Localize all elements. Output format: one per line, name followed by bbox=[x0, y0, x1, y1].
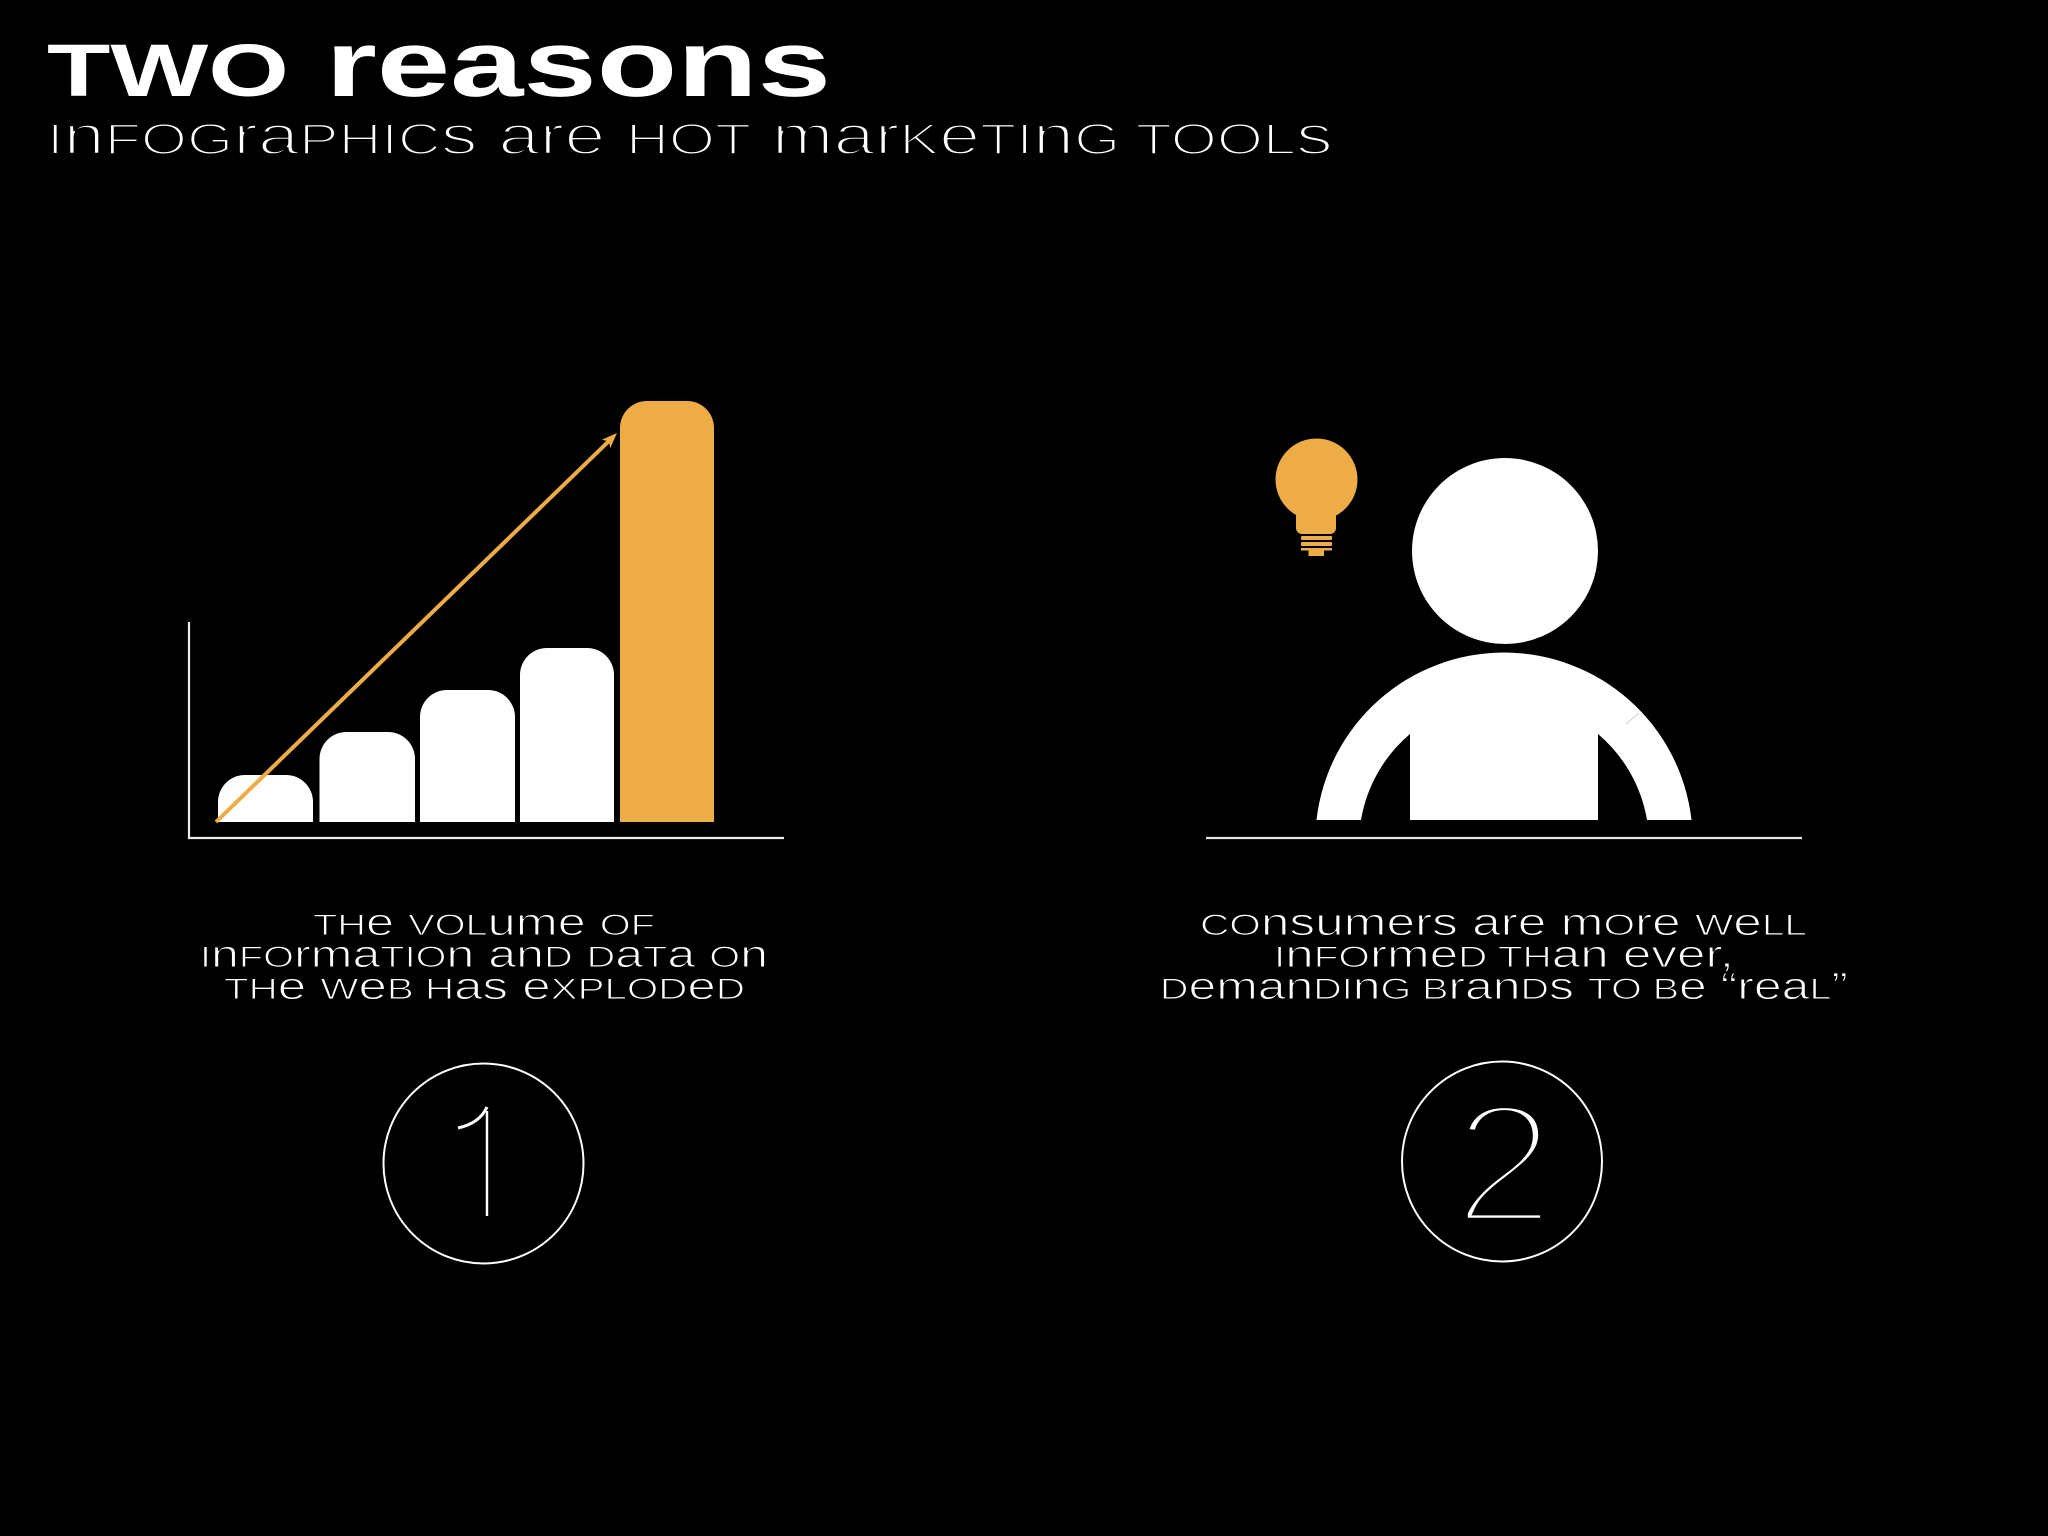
number badge 1: 1 bbox=[432, 1065, 535, 1272]
title: TWO reasons bbox=[47, 11, 831, 116]
bar 2 bbox=[320, 732, 415, 822]
bar 3 bbox=[420, 690, 515, 822]
bar 1 bbox=[218, 775, 313, 822]
panel: reason 2 bbox=[1160, 438, 1848, 1262]
arrow bbox=[216, 433, 617, 822]
icon: light bulb bbox=[1276, 438, 1358, 556]
panel: reason 1 bbox=[189, 401, 784, 1272]
bar 4 bbox=[520, 648, 614, 822]
infographic canvas bbox=[48, 44, 1846, 1264]
reason 2 text: CO nsumers are m Ore W eLL bbox=[1200, 902, 1807, 944]
bar 5 highlighted bbox=[620, 401, 714, 822]
reason 2 text: Deman DInG B ran Ds TO B e “rea L” bbox=[1160, 966, 1848, 1008]
seam on shoulder bbox=[1626, 713, 1639, 724]
reason 1 text: InFO rma TIO n an D DaTa On bbox=[200, 934, 768, 976]
number badge 2 bbox=[1402, 1062, 1602, 1262]
reason 2 text: InFO rme D TH an ever, bbox=[1274, 934, 1734, 976]
reason 1 text: TH e VOL ume OF bbox=[313, 902, 655, 944]
bar chart bbox=[189, 401, 784, 838]
icon: person with light bulb bbox=[1276, 438, 1692, 820]
reason 2 text bbox=[1160, 902, 1848, 1008]
reason 1 text: TH e W eB H as e XPLOD eD bbox=[224, 966, 745, 1008]
number badge 1 bbox=[384, 1064, 584, 1272]
chart axes bbox=[189, 622, 784, 838]
person body bbox=[1316, 653, 1692, 820]
number badge 2: 2 bbox=[1453, 1068, 1555, 1260]
reason 1 text bbox=[200, 902, 768, 1008]
subtitle: InFOG ra PHIC s are HOT mar KeTInG TOOL s bbox=[47, 104, 1333, 166]
person head bbox=[1412, 458, 1598, 644]
baseline bbox=[1206, 837, 1802, 839]
